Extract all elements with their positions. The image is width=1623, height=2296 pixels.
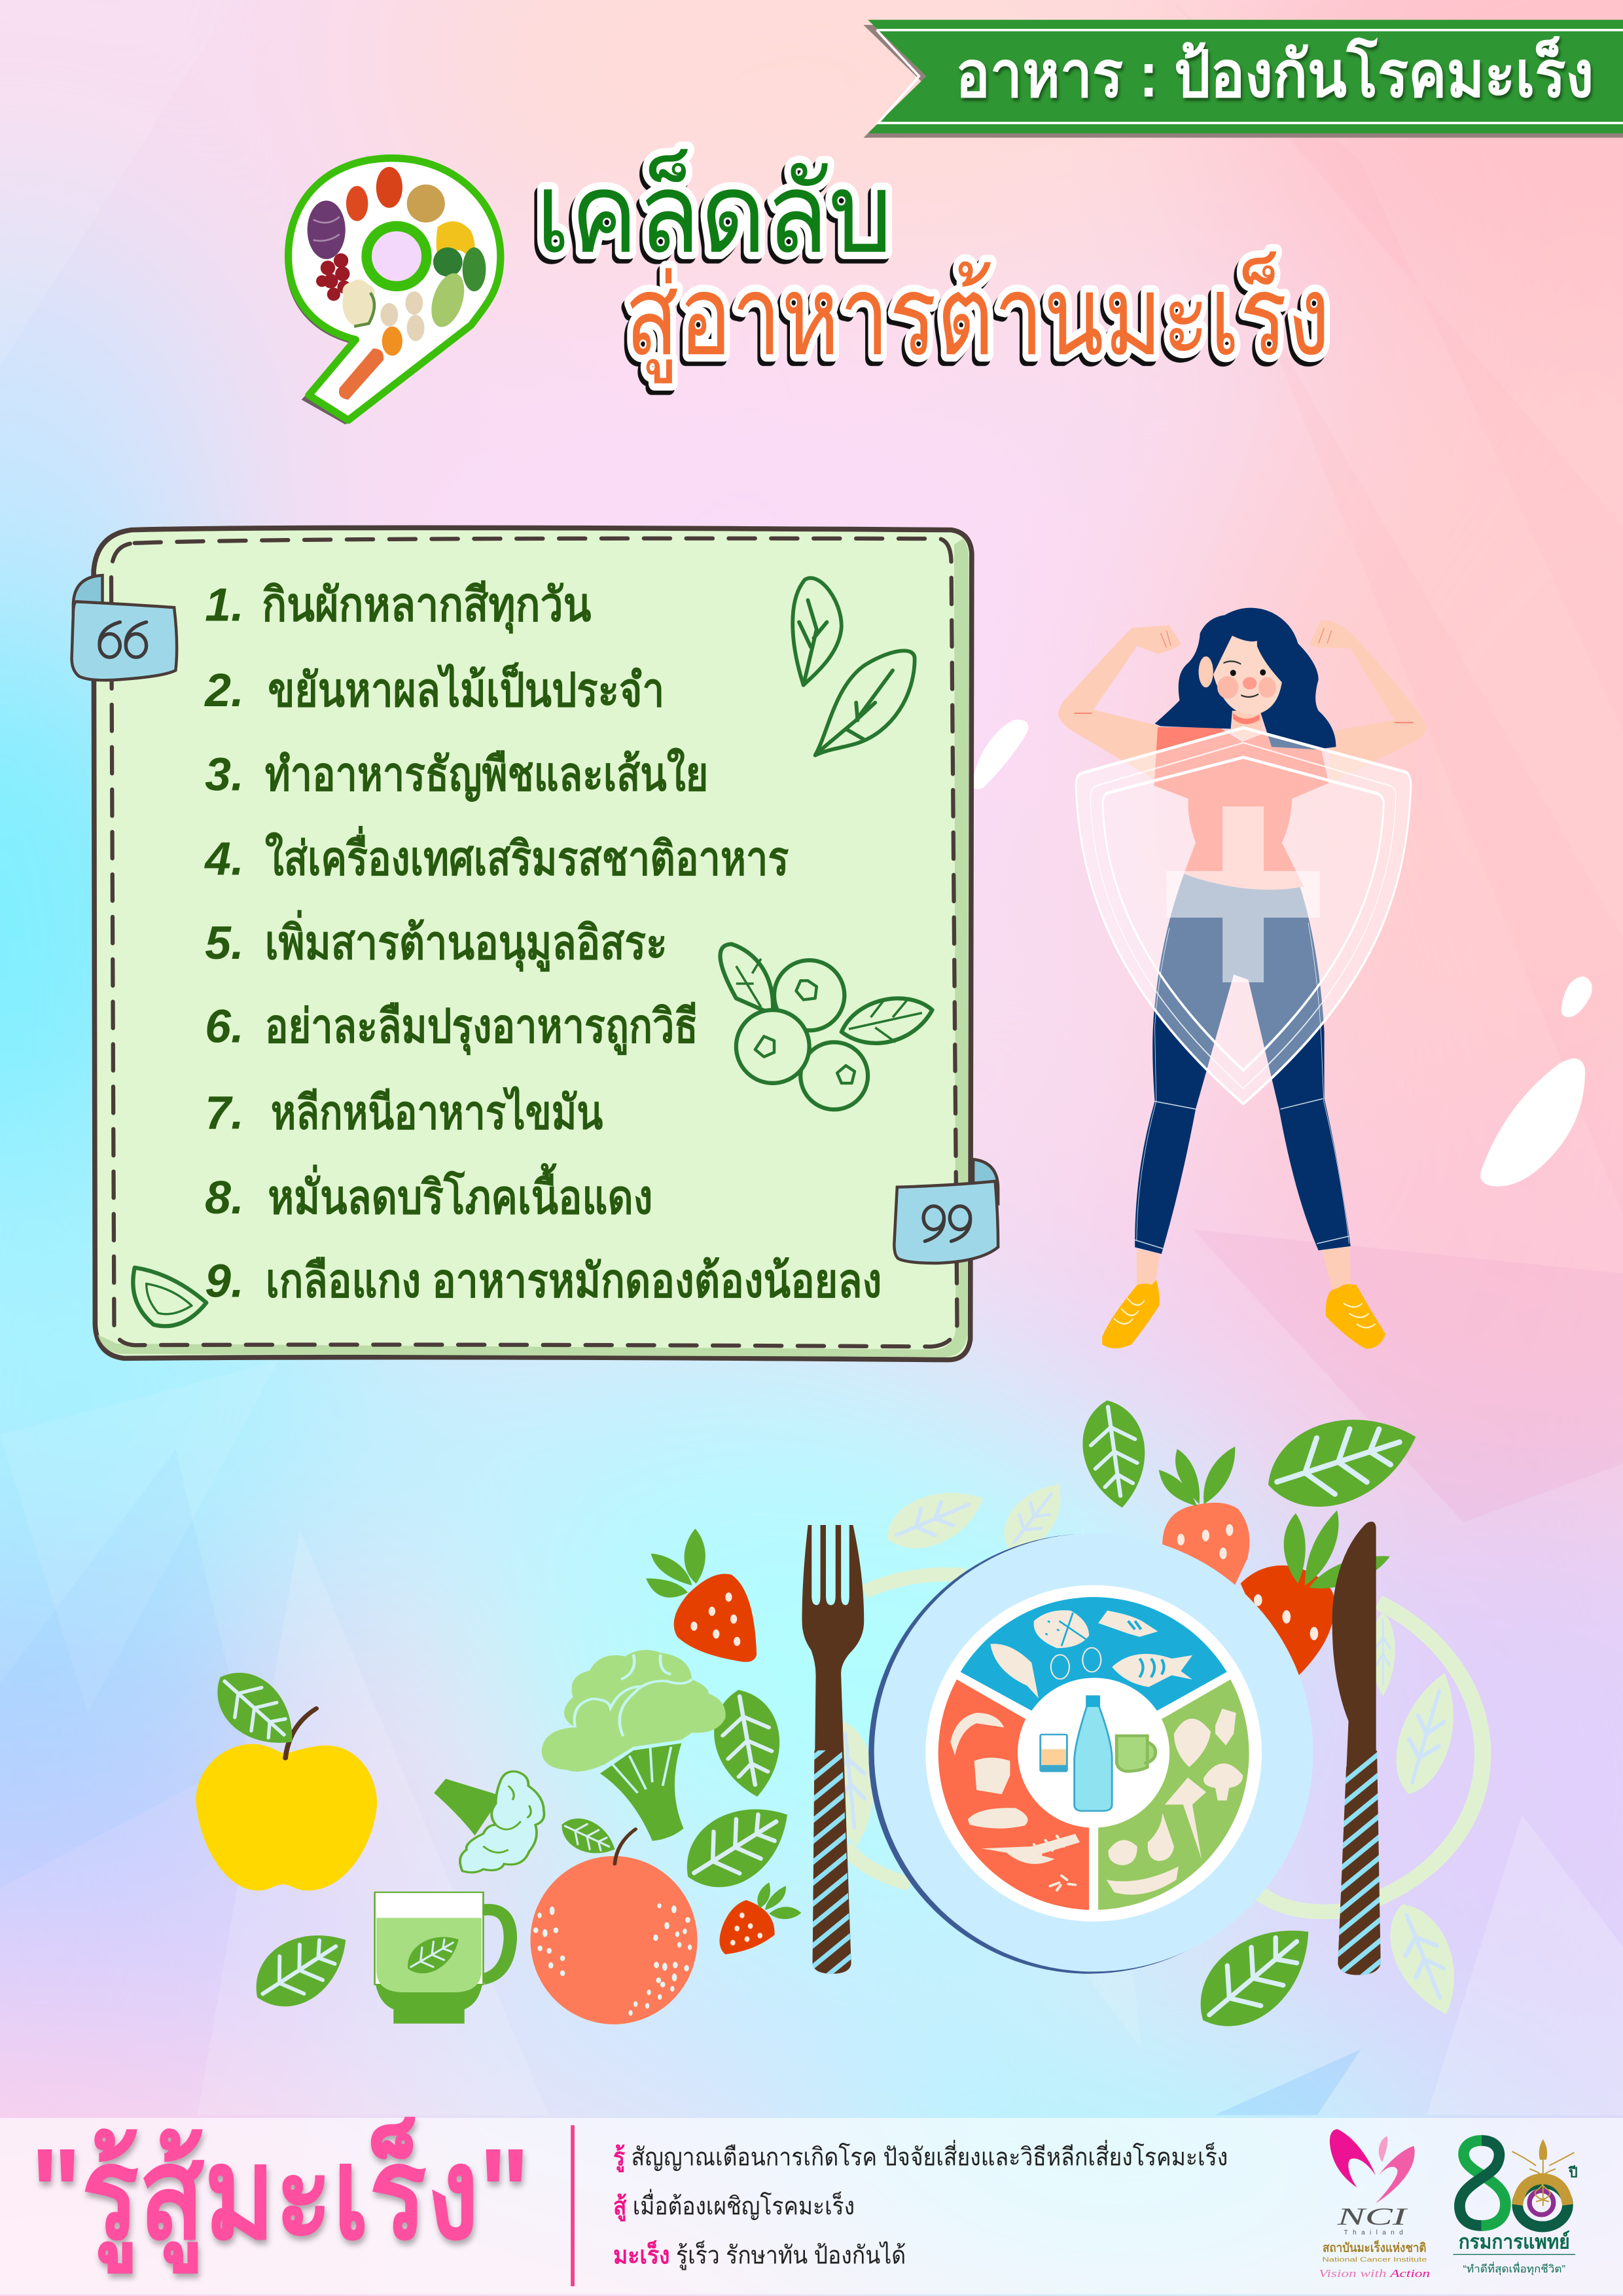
logo: Department of Medical Services 80 years bbox=[1453, 2140, 1578, 2276]
strawberry: red bbox=[1241, 1511, 1390, 1676]
department motto: “ทำดีที่สุดเพื่อทุกชีวิต” bbox=[1463, 2261, 1565, 2276]
tip 1: กินผักหลากสีทุกวัน bbox=[262, 579, 592, 634]
motto: Vision with Action bbox=[1319, 2267, 1430, 2280]
leaf: lower left bbox=[241, 1914, 363, 2023]
leaf: below knife bbox=[1180, 1904, 1332, 2048]
divider bbox=[571, 2125, 575, 2286]
years: ปี bbox=[1568, 2164, 1578, 2180]
face bbox=[1199, 636, 1282, 715]
icon: spinach leaf 2 bbox=[815, 651, 915, 755]
apple bbox=[196, 1708, 377, 1890]
leaf: beside fork lower bbox=[670, 1786, 805, 1905]
tip 5: 5. bbox=[205, 917, 244, 969]
title line 2: สู่อาหารต้านมะเร็ง bbox=[625, 251, 1330, 384]
logo: National Cancer Institute bbox=[1319, 2129, 1430, 2280]
tip 7: หลีกหนีอาหารไขมัน bbox=[271, 1085, 603, 1139]
leaf: above plate right bbox=[1256, 1398, 1429, 1524]
institute Thai name: สถาบันมะเร็งแห่งชาติ bbox=[1323, 2239, 1426, 2254]
plate bbox=[868, 1534, 1313, 1974]
leaf: on apple bbox=[202, 1657, 310, 1763]
tip 8: 8. bbox=[205, 1172, 244, 1224]
department name: กรมการแพทย์ bbox=[1459, 2230, 1570, 2253]
leaf: on orange bbox=[556, 1810, 621, 1863]
knife handle stripes bbox=[1338, 1750, 1381, 1975]
tip 9: เกลือแกง อาหารหมักดองต้องน้อยลง bbox=[266, 1255, 882, 1307]
fork handle stripes bbox=[813, 1750, 851, 1974]
strawberry small bbox=[719, 1882, 801, 1954]
trousers bbox=[1135, 874, 1351, 1254]
cross bbox=[1166, 806, 1320, 982]
shield bbox=[1076, 728, 1411, 1104]
slogan line 2: สู้ เมื่อต้องเผชิญโรคมะเร็ง bbox=[613, 2189, 855, 2222]
banner: food, cancer prevention bbox=[863, 20, 1623, 137]
broccoli outline bbox=[434, 1772, 544, 1873]
drinks bbox=[1041, 1696, 1156, 1811]
tip 4: 4. bbox=[204, 833, 244, 885]
card body bbox=[94, 528, 972, 1360]
number 0 with purple ring bbox=[1518, 2179, 1567, 2227]
illustration: plate group with cutlery bbox=[802, 1446, 1483, 2022]
tip 7: 7. bbox=[205, 1086, 244, 1139]
tip 6: อย่าละลืมปรุงอาหารถูกวิธี bbox=[265, 1000, 698, 1055]
hair bbox=[1155, 608, 1336, 749]
Thailand: Thailand bbox=[1344, 2229, 1403, 2236]
vegetables inside the 9 bbox=[308, 167, 486, 400]
list of tips bbox=[204, 579, 882, 1307]
sector: grains bbox=[938, 1679, 1089, 1910]
neck bbox=[1232, 708, 1262, 739]
fork bbox=[802, 1525, 864, 1974]
tip 6: 6. bbox=[205, 1000, 244, 1052]
sector: vegetables and fruit bbox=[1098, 1679, 1249, 1910]
quote tag right bbox=[894, 1159, 998, 1263]
leaf: above plate left bbox=[1077, 1396, 1152, 1512]
tip 3: 3. bbox=[205, 749, 244, 801]
tip 2: ขยันหาผลไม้เป็นประจำ bbox=[268, 662, 664, 717]
tip 1: 1. bbox=[205, 579, 244, 631]
slogan line 1: รู้ สัญญาณเตือนการเกิดโรค ปัจจัยเสี่ยงและวิธีหลีกเสี่ยงโรคมะเร็ง bbox=[613, 2140, 1228, 2173]
institute English name: National Cancer Institute bbox=[1322, 2256, 1427, 2263]
panel: nine tips note card bbox=[72, 528, 998, 1360]
closing quote mark bbox=[923, 1206, 971, 1241]
strawberry large bbox=[646, 1529, 757, 1662]
title line 1: เคล็ดลับ bbox=[535, 149, 893, 276]
orange bbox=[530, 1829, 698, 2024]
quote tag left bbox=[72, 575, 177, 680]
icon: big number 9 filled with vegetables bbox=[285, 158, 501, 425]
tip 3: ทำอาหารธัญพืชและเส้นใย bbox=[265, 747, 708, 802]
icon: spinach leaf 1 bbox=[793, 578, 842, 685]
tip 4: ใส่เครื่องเทศเสริมรสชาติอาหาร bbox=[265, 825, 789, 885]
NCI script: NCI bbox=[1336, 2203, 1408, 2230]
slogan line 3: มะเร็ง รู้เร็ว รักษาทัน ป้องกันได้ bbox=[613, 2240, 906, 2270]
footer band bbox=[0, 2117, 1623, 2294]
opening quote mark bbox=[99, 622, 147, 657]
medical staff emblem bbox=[1512, 2140, 1574, 2206]
leaf: beside fork top bbox=[707, 1684, 789, 1803]
campaign slogan: "รู้สู้มะเร็ง" bbox=[31, 2117, 530, 2274]
decorative white swooshes bbox=[972, 720, 1592, 1187]
legs and shoes bbox=[1137, 1246, 1351, 1293]
pale background leaves and swirls bbox=[820, 1473, 1483, 2022]
tip 2: 2. bbox=[204, 664, 244, 717]
number 8 bbox=[1459, 2140, 1505, 2225]
tip 5: เพิ่มสารต้านอนุมูลอิสระ bbox=[265, 910, 668, 972]
illustration: strong woman with shield bbox=[1058, 608, 1426, 1349]
heart mark bbox=[1330, 2129, 1415, 2203]
illustration: fruit and vegetable group bbox=[196, 1529, 801, 2024]
icon: lime slice bbox=[133, 1268, 206, 1326]
icon: berries with leaves bbox=[721, 944, 932, 1109]
knife bbox=[1332, 1522, 1381, 1975]
mug of green tea bbox=[375, 1892, 510, 2024]
arms bbox=[1058, 620, 1426, 783]
shirt bbox=[1154, 727, 1329, 889]
sector: protein bbox=[961, 1597, 1227, 1711]
tip 8: หมั่นลดบริโภคเนื้อแดง bbox=[268, 1162, 652, 1224]
broccoli green bbox=[542, 1650, 726, 1841]
tip 9: 9. bbox=[205, 1255, 244, 1307]
strawberry: salmon bbox=[1159, 1446, 1249, 1588]
leaf: on mug bbox=[400, 1926, 466, 1982]
